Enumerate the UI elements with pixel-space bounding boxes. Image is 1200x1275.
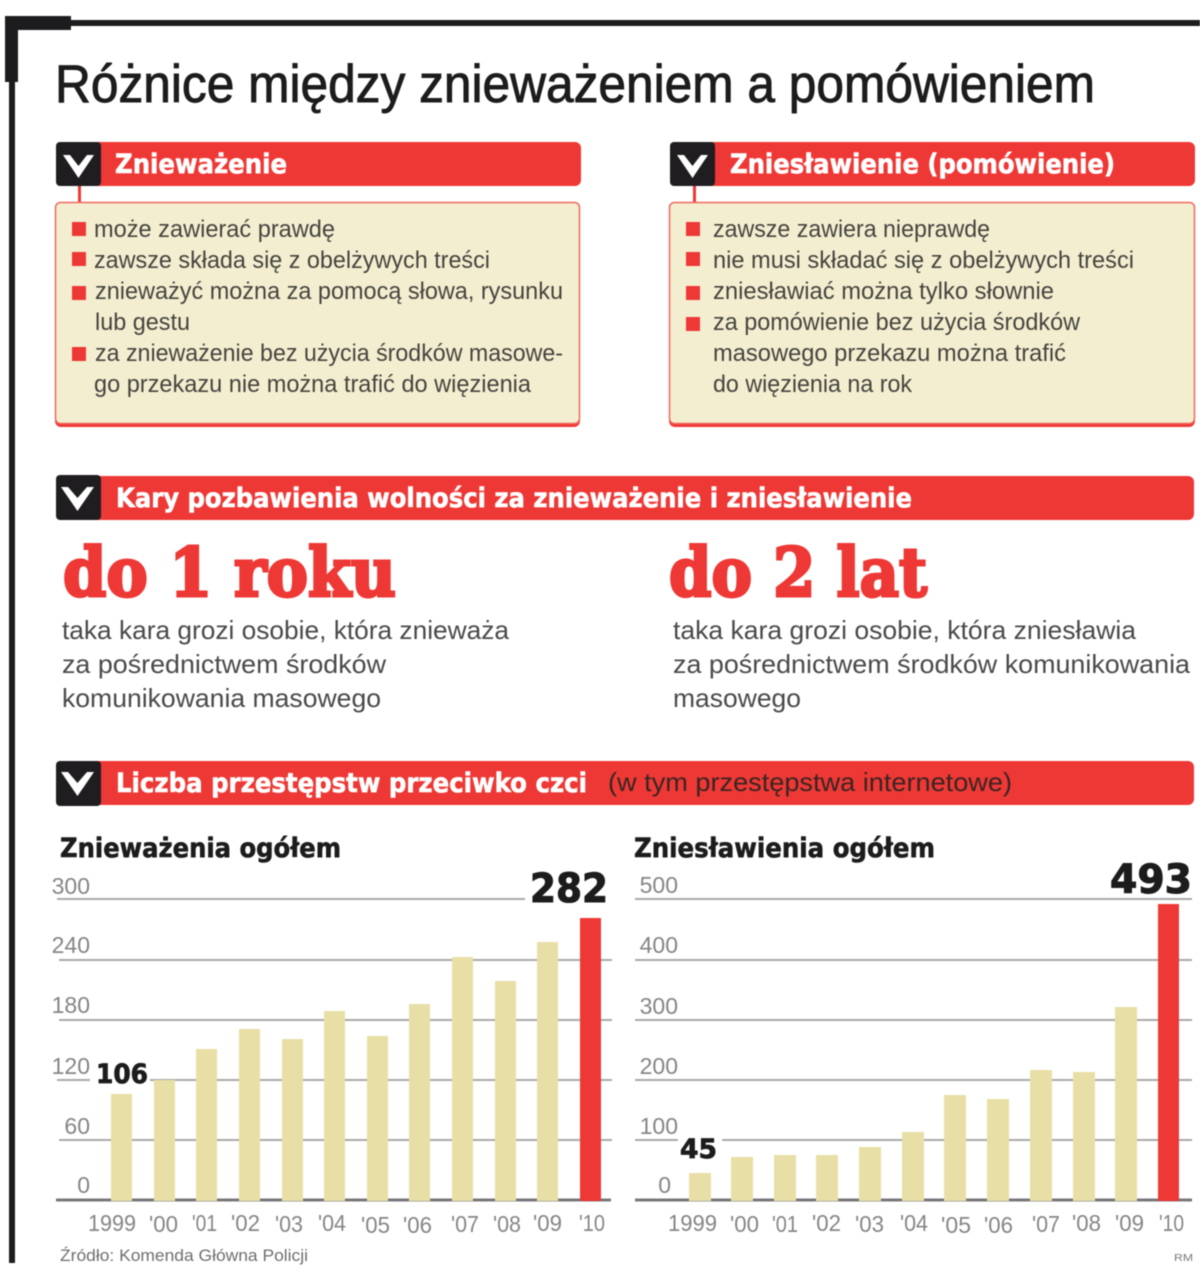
y axis labels: 120 bbox=[52, 1053, 90, 1079]
penalty: do 1 roku bbox=[62, 533, 510, 713]
x axis labels: '06 bbox=[403, 1212, 432, 1238]
x axis labels bbox=[88, 1210, 605, 1238]
x axis labels: '00 bbox=[149, 1211, 178, 1237]
y axis labels: 500 bbox=[640, 872, 678, 898]
x axis labels: '07 bbox=[1032, 1211, 1060, 1237]
penalty: do 2 lat: do 2 lat bbox=[669, 533, 927, 612]
author initials: RM bbox=[1174, 1253, 1193, 1264]
x axis labels: '04 bbox=[900, 1210, 928, 1236]
heading: znieważenie: Znieważenie bbox=[115, 149, 287, 180]
x axis labels bbox=[668, 1210, 1184, 1238]
description: do 2 lat: masowego bbox=[673, 683, 801, 713]
bars bbox=[111, 918, 601, 1201]
description: do 1 roku: taka kara grozi osobie, która znieważa bbox=[62, 615, 510, 645]
x axis labels: '08 bbox=[1072, 1210, 1101, 1236]
text box: zniesławienie: zawsze zawiera nieprawdę bbox=[713, 216, 990, 243]
description: do 1 roku bbox=[62, 615, 510, 713]
x axis labels: '05 bbox=[941, 1212, 971, 1238]
y axis labels: 60 bbox=[64, 1113, 90, 1139]
y axis labels: 400 bbox=[640, 932, 678, 958]
heading: kary pozbawienia wolności: Kary pozbawienia wolności za znieważenie i zniesławienie bbox=[116, 483, 912, 514]
x axis labels: '09 bbox=[533, 1210, 562, 1236]
text box: znieważenie: może zawierać prawdę bbox=[94, 216, 335, 243]
y axis labels: 180 bbox=[52, 992, 90, 1018]
x axis labels: '00 bbox=[730, 1211, 759, 1237]
panel: zniesławienie bbox=[669, 142, 1195, 427]
text box: znieważenie: go przekazu nie można trafić do więzienia bbox=[94, 371, 532, 398]
x axis labels: '07 bbox=[451, 1211, 479, 1237]
heading: liczba przestępstw: (w tym przestępstwa internetowe) bbox=[608, 767, 1012, 797]
x axis labels: '04 bbox=[318, 1210, 346, 1236]
chart title: Znieważenia ogółem bbox=[60, 833, 341, 864]
chart: znieważenia ogółem bbox=[52, 833, 612, 1238]
heading: liczba przestępstw: Liczba przestępstw przeciwko czci bbox=[116, 768, 587, 799]
heading: liczba przestępstw bbox=[56, 761, 1194, 806]
x axis labels: '10 bbox=[579, 1210, 605, 1236]
y axis labels: 0 bbox=[658, 1172, 671, 1198]
text box: znieważenie bbox=[55, 202, 580, 427]
text box: znieważenie: za znieważenie bez użycia środków masowe- bbox=[95, 340, 563, 367]
y axis labels bbox=[640, 872, 678, 1198]
x axis labels: '03 bbox=[855, 1211, 884, 1237]
description: do 2 lat: za pośrednictwem środków komunikowania bbox=[673, 649, 1191, 679]
penalty: do 2 lat bbox=[669, 533, 1191, 713]
heading: znieważenie bbox=[56, 142, 581, 186]
x axis labels: '09 bbox=[1115, 1210, 1144, 1236]
value labels: 106 bbox=[96, 1059, 148, 1090]
text box: znieważenie: znieważyć można za pomocą słowa, rysunku bbox=[95, 278, 563, 305]
x axis labels: '03 bbox=[275, 1211, 303, 1237]
y axis labels: 100 bbox=[640, 1113, 678, 1139]
x axis labels: '01 bbox=[192, 1210, 217, 1236]
y axis labels: 200 bbox=[640, 1053, 678, 1079]
x axis labels: '08 bbox=[493, 1211, 521, 1237]
text box: zniesławienie: do więzienia na rok bbox=[713, 371, 913, 398]
value labels: 45 bbox=[680, 1134, 717, 1165]
chart title: Zniesławienia ogółem bbox=[634, 833, 935, 864]
grid lines bbox=[635, 899, 1192, 1200]
chart: znieważenia ogółem: 282 bbox=[530, 866, 608, 912]
x axis labels: '05 bbox=[361, 1212, 390, 1238]
text box: znieważenie: lub gestu bbox=[95, 309, 190, 336]
y axis labels: 240 bbox=[52, 932, 90, 958]
source note: Źródło: Komenda Główna Policji bbox=[60, 1246, 308, 1265]
x axis labels: '02 bbox=[231, 1210, 260, 1236]
heading: kary pozbawienia wolności bbox=[56, 475, 1194, 520]
text box: zniesławienie: masowego przekazu można trafić bbox=[713, 340, 1066, 367]
y axis labels: 300 bbox=[640, 993, 678, 1019]
y axis labels: 0 bbox=[77, 1172, 90, 1198]
description: do 2 lat: taka kara grozi osobie, która zniesławia bbox=[673, 615, 1137, 645]
panel: znieważenie bbox=[55, 142, 581, 427]
text box: zniesławienie: nie musi składać się z obelżywych treści bbox=[713, 247, 1134, 274]
heading: zniesławienie bbox=[670, 142, 1195, 186]
title: Różnice między znieważeniem a pomówieniem bbox=[55, 55, 1095, 114]
text box: znieważenie: zawsze składa się z obelżywych treści bbox=[94, 247, 490, 274]
y axis labels bbox=[52, 873, 90, 1198]
text box: zniesławienie bbox=[669, 202, 1195, 427]
penalty: do 1 roku: do 1 roku bbox=[63, 533, 396, 612]
description: do 1 roku: za pośrednictwem środków bbox=[62, 649, 386, 679]
text box: zniesławienie: zniesławiać można tylko słownie bbox=[713, 278, 1054, 305]
y axis labels: 300 bbox=[52, 873, 90, 899]
x axis labels: 1999 bbox=[668, 1210, 717, 1236]
connector bbox=[78, 186, 81, 203]
chart: zniesławienia ogółem: 493 bbox=[1110, 857, 1192, 903]
description: do 1 roku: komunikowania masowego bbox=[62, 683, 381, 713]
x axis labels: 1999 bbox=[88, 1210, 136, 1236]
x axis labels: '06 bbox=[984, 1212, 1013, 1238]
description: do 2 lat bbox=[673, 615, 1191, 713]
text box: zniesławienie: za pomówienie bez użycia środków bbox=[713, 309, 1081, 336]
x axis labels: '10 bbox=[1159, 1210, 1184, 1236]
chart: zniesławienia ogółem bbox=[634, 833, 1192, 1238]
x axis labels: '02 bbox=[812, 1210, 841, 1236]
heading: zniesławienie: Zniesławienie (pomówienie) bbox=[730, 149, 1115, 180]
grid lines bbox=[56, 899, 612, 1200]
connector bbox=[693, 186, 696, 203]
bars bbox=[689, 904, 1179, 1201]
x axis labels: '01 bbox=[772, 1211, 798, 1237]
